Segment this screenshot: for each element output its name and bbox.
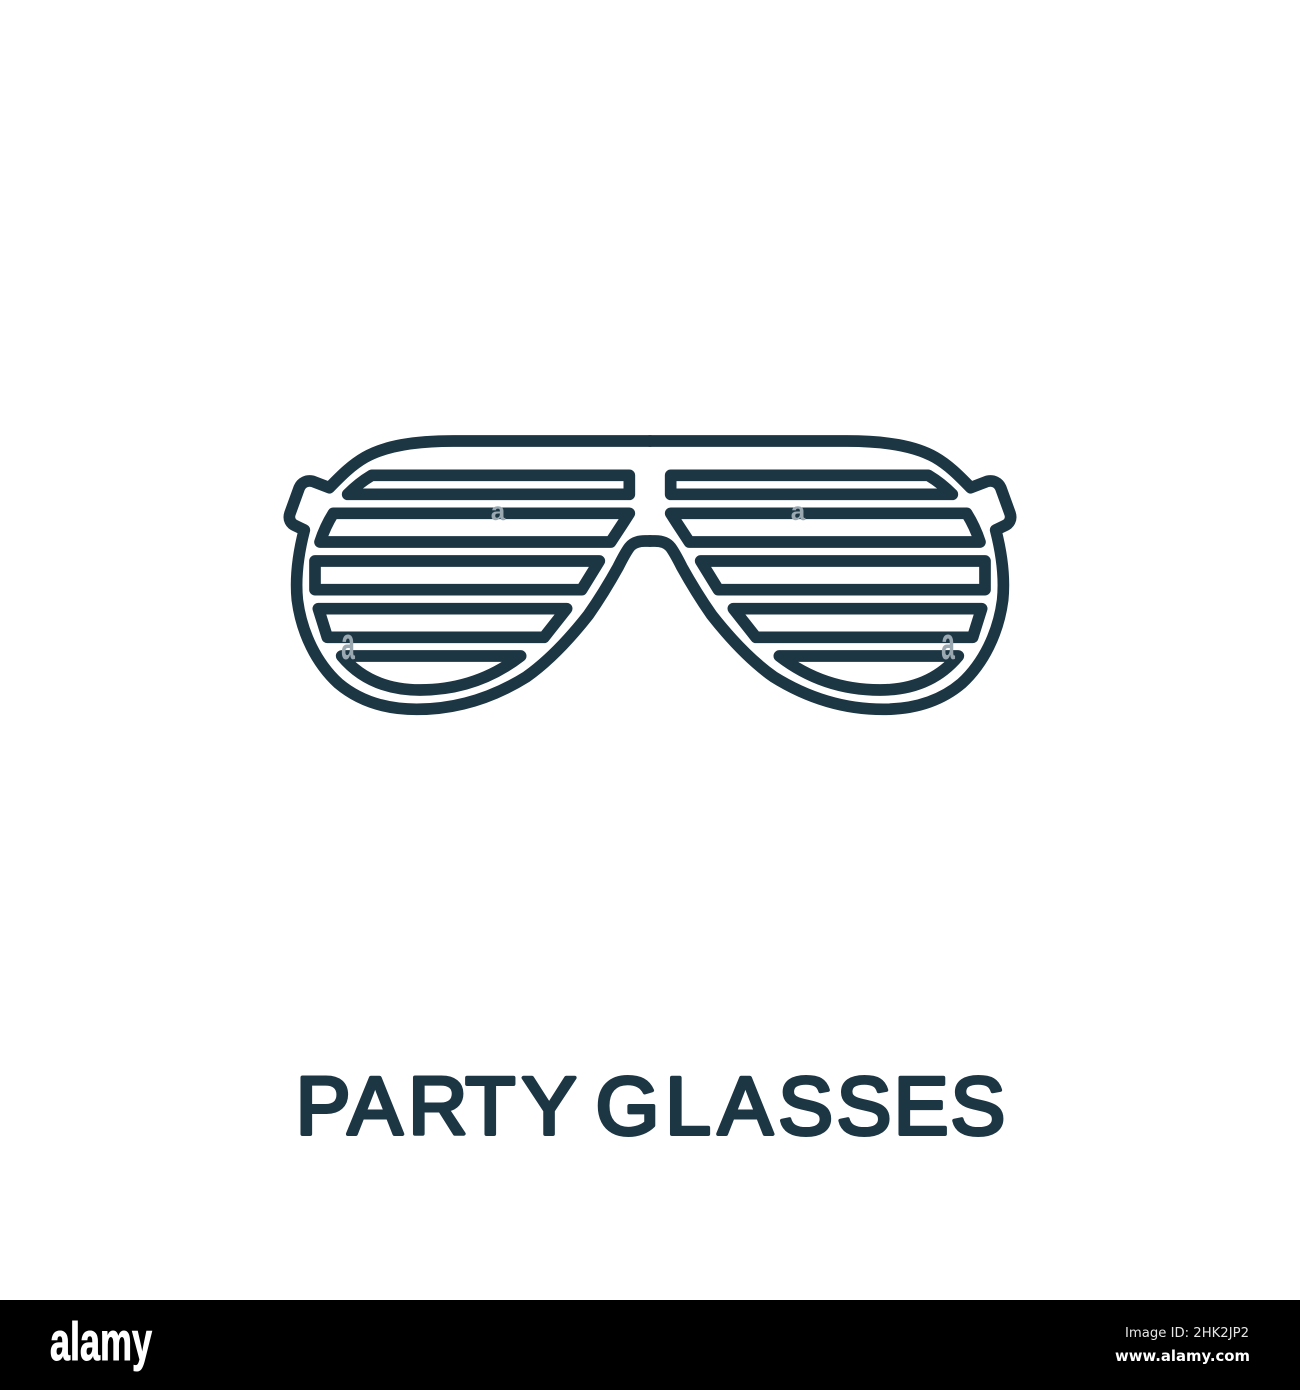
watermark marks on the slats: a (941, 618, 955, 669)
left lens with frame and slats (289, 441, 650, 709)
left frame outline (289, 441, 650, 709)
website: www.alamy.com (1115, 1347, 1250, 1365)
footer logo: alamy (50, 1312, 152, 1372)
left slat 3 (315, 561, 599, 590)
footer bar (0, 1300, 1300, 1390)
watermark marks on the slats (341, 496, 955, 669)
image id: Image ID: 2HK2JP2 (1125, 1326, 1249, 1341)
left slat 5 (342, 656, 521, 690)
icon: party shutter glasses (289, 441, 1011, 709)
right lens with frame and slats (650, 441, 1011, 709)
watermark marks on the slats: a (341, 618, 355, 669)
right slat 5 (779, 656, 958, 690)
title: PARTY GLASSES (296, 1061, 1005, 1152)
left slat 4 (318, 609, 567, 637)
right slat 4 (733, 609, 982, 637)
left slat 1 (348, 475, 629, 494)
watermark marks on the slats: a (791, 496, 806, 526)
right frame outline (650, 441, 1011, 709)
right slat 3 (701, 561, 985, 590)
left slat 2 (320, 513, 629, 542)
right slat 1 (671, 475, 952, 494)
watermark marks on the slats: a (491, 496, 506, 526)
right slat 2 (671, 513, 980, 542)
